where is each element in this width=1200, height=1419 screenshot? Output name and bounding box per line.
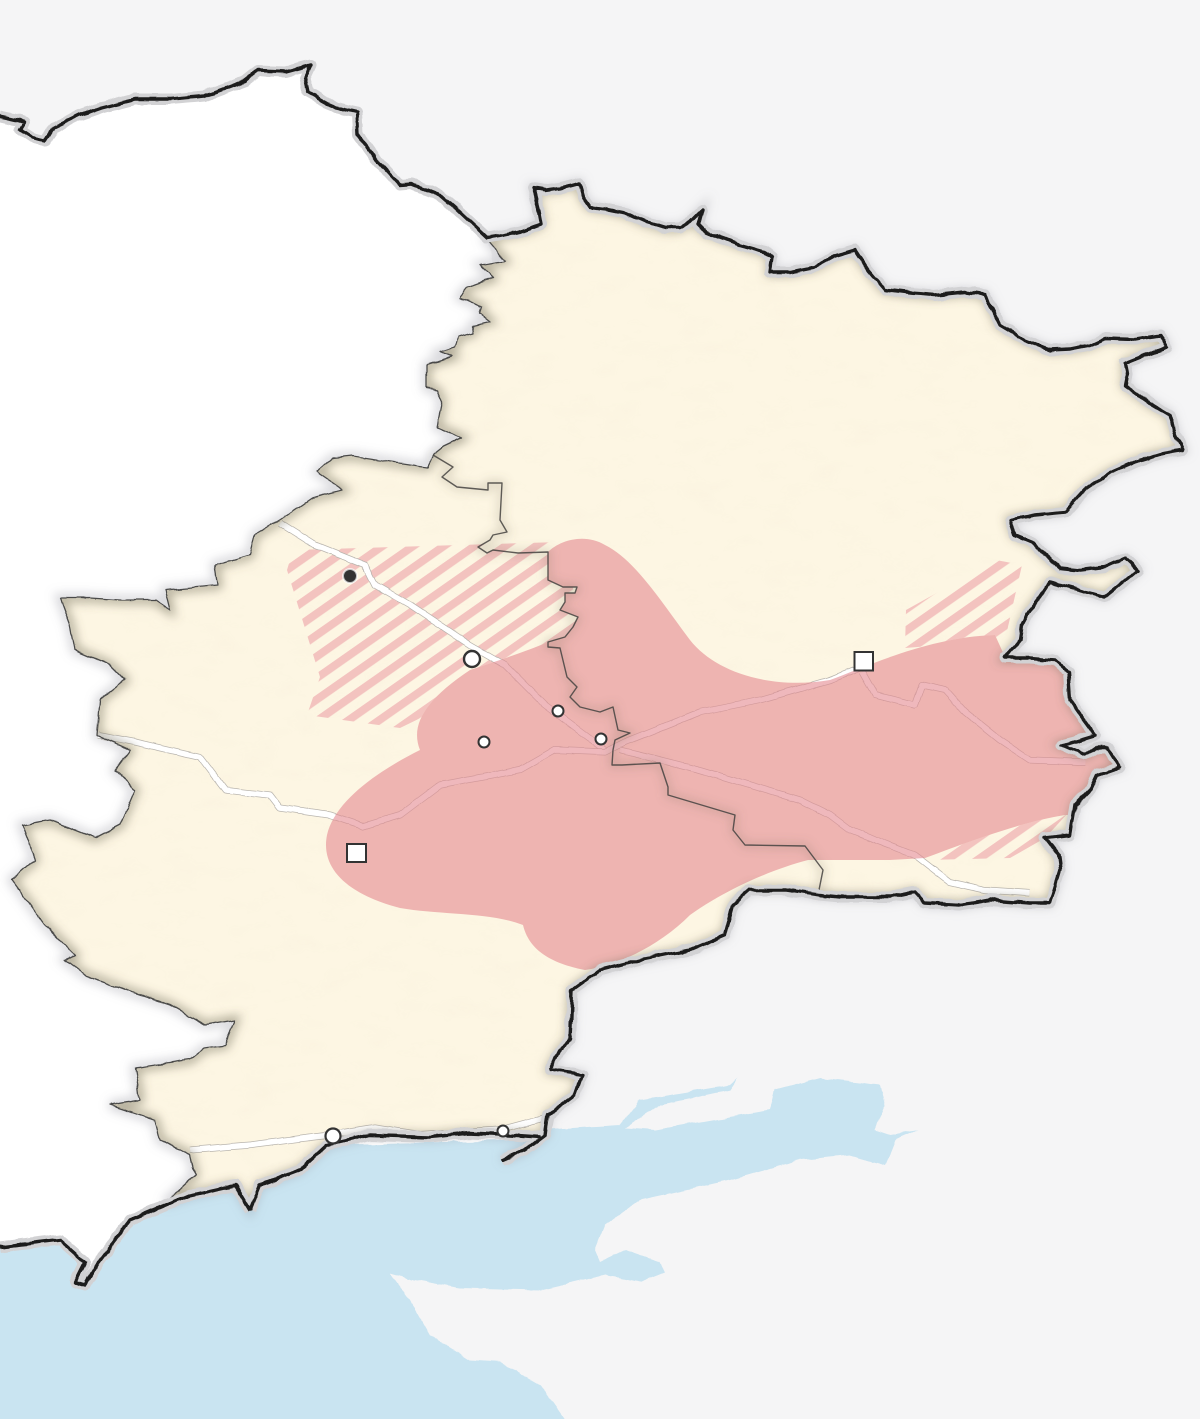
road: west to east	[98, 668, 1085, 826]
base under the red zone, hides hatching	[422, 546, 1067, 844]
shadow around the cream region	[12, 183, 1183, 1210]
marker: capital square west	[347, 844, 366, 862]
hatched zone: south-east	[926, 813, 1068, 860]
marker: coastal town	[498, 1126, 508, 1136]
marker: capital square east	[854, 652, 873, 670]
marker: dark city	[343, 569, 357, 583]
road: south-east	[620, 750, 1030, 893]
road: south coast	[190, 1117, 548, 1150]
marker: small city	[478, 736, 490, 748]
marker: coastal city	[326, 1128, 340, 1144]
internal boundary between districts	[433, 455, 823, 895]
soft shadow along the internal boundary	[433, 455, 823, 895]
neighbouring white land	[0, 65, 520, 1285]
marker: small city	[596, 734, 606, 744]
cream region	[12, 183, 1183, 1210]
marker: large circle city	[464, 651, 480, 667]
thin western boundary of the cream region	[12, 240, 505, 1203]
marker: small city	[552, 706, 564, 716]
inner shading along the border	[12, 183, 1183, 1210]
hatched zone: north-east	[905, 560, 1022, 648]
road: north-west	[280, 523, 605, 750]
red occupied zone	[326, 539, 1130, 970]
sea	[0, 1078, 918, 1419]
hatched zone: west	[287, 542, 582, 728]
